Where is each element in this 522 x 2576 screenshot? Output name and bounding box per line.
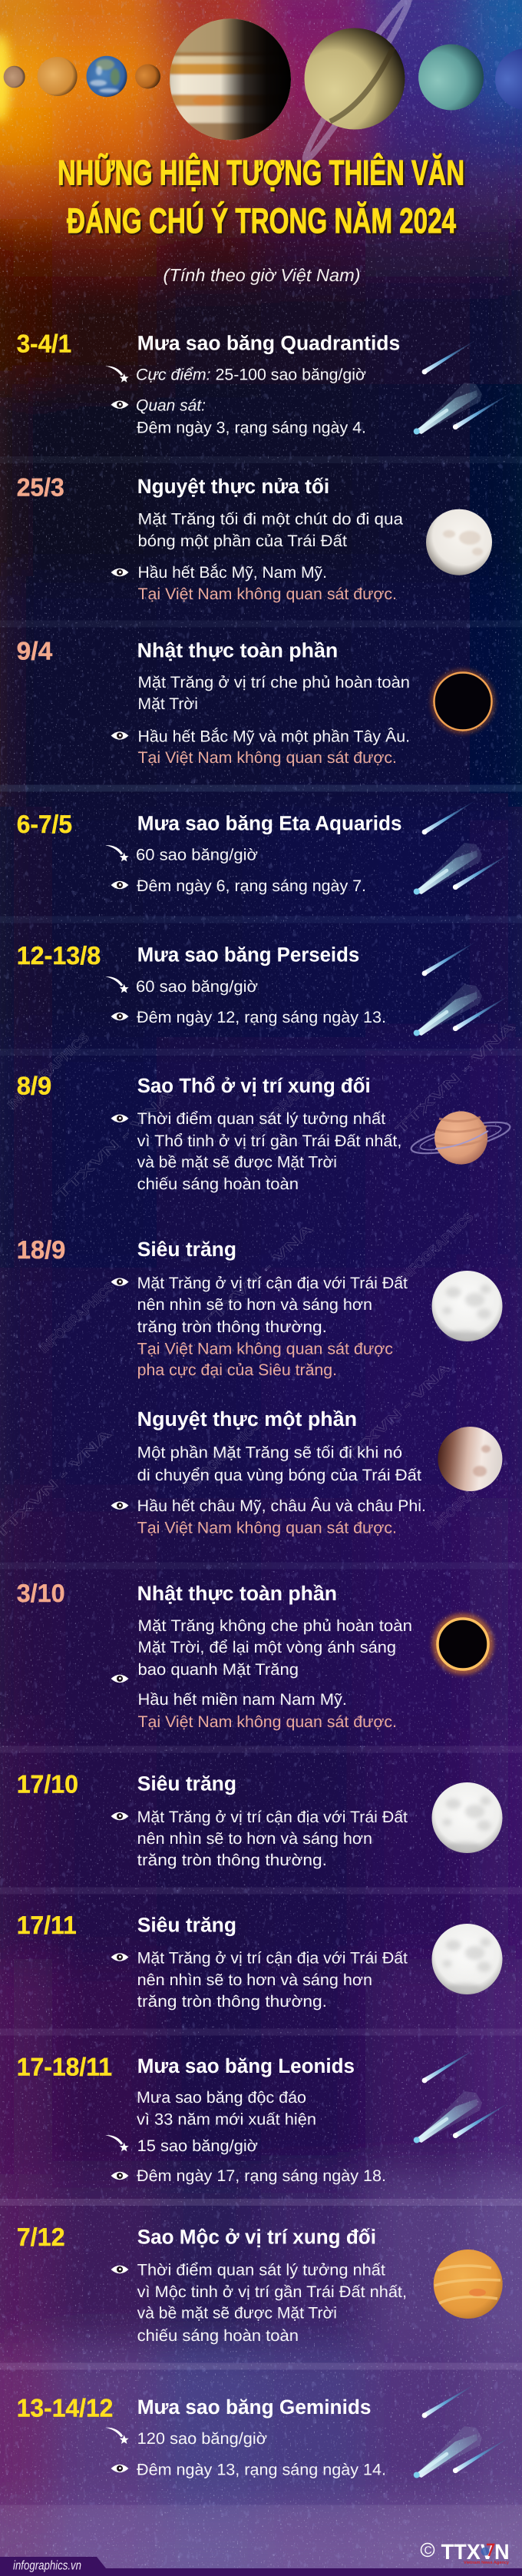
- event: 3/10 annular solar eclipse: Tại Việt Nam không quan sát được.: [138, 1713, 397, 1731]
- icon: solar eclipse: [431, 669, 495, 734]
- event: 13-14/12 Geminids: 120 sao băng/giờ: [137, 2430, 267, 2448]
- event: 3/10 annular solar eclipse: 3/10: [17, 1579, 65, 1607]
- event: 9/4 total solar eclipse: Mặt Trăng ở vị trí che phủ hoàn toàn: [138, 674, 410, 691]
- planet: Saturn ring: [299, 0, 415, 164]
- event: 8/9 Saturn opposition: vì Thổ tinh ở vị trí gần Trái Đất nhất,: [137, 1132, 401, 1150]
- event: 6-7/5 Eta Aquarids: [17, 800, 510, 895]
- icon: annular eclipse: [432, 1613, 494, 1675]
- event: 17/10 supermoon: Siêu trăng: [137, 1772, 236, 1795]
- event: 9/4 total solar eclipse: Nhật thực toàn phần: [137, 639, 338, 662]
- watermarks: INFOGRAPHICS: [182, 1417, 263, 1495]
- icon: moon: [426, 509, 492, 575]
- event: 8/9 Saturn opposition: và bề mặt sẽ được Mặt Trời: [137, 1154, 337, 1172]
- event: 17/10 supermoon: nên nhìn sẽ to hơn và sáng hơn: [137, 1830, 372, 1848]
- event: 7/12 Jupiter opposition: Sao Mộc ở vị trí xung đối: [137, 2226, 376, 2249]
- event: 3/10 annular solar eclipse: Mặt Trời, để lại một vòng ánh sáng: [138, 1639, 396, 1656]
- watermarks: TTXVN - VNA: [342, 1361, 454, 1467]
- logo: TTXVN: TTXVN: [441, 2540, 510, 2564]
- icon: supermoon: [431, 1924, 502, 1994]
- event: 12-13/8 Perseids: 60 sao băng/giờ: [136, 978, 258, 996]
- event: 25/3 penumbral lunar eclipse: bóng một phần của Trái Đất: [138, 532, 347, 550]
- event: 17-18/11 Leonids: 15 sao băng/giờ: [137, 2137, 258, 2155]
- icon: Jupiter: [434, 2249, 503, 2319]
- source: infographics.vn: infographics.vn: [13, 2559, 81, 2573]
- event: 9/4 total solar eclipse: Hầu hết Bắc Mỹ và một phần Tây Âu.: [138, 728, 410, 746]
- event: 18/9 supermoon: pha cực đại của Siêu trăng.: [137, 1361, 337, 1379]
- event: 7/12 Jupiter opposition: 7/12: [17, 2223, 65, 2251]
- event: 6-7/5 Eta Aquarids: 6-7/5: [17, 810, 72, 838]
- icon: supermoon: [431, 1782, 502, 1853]
- event: 25/3 penumbral lunar eclipse: Hầu hết Bắc Mỹ, Nam Mỹ.: [138, 563, 327, 582]
- logo: TTXVN: C: [424, 2544, 432, 2556]
- watermarks: TTXVN - VNA: [393, 1019, 518, 1137]
- planet: Uranus: [418, 45, 484, 111]
- event: 13-14/12 Geminids: Mưa sao băng Geminids: [137, 2395, 371, 2419]
- planet: Neptune: [495, 48, 522, 110]
- event: 17-18/11 Leonids: vì 33 năm mới xuất hiện: [137, 2111, 316, 2129]
- event: partial lunar eclipse: Một phần Mặt Trăng sẽ tối đi khi nó: [137, 1444, 402, 1462]
- event: 13-14/12 Geminids: [17, 2383, 510, 2478]
- event: 17/10 supermoon: Mặt Trăng ở vị trí cận địa với Trái Đất: [137, 1809, 408, 1826]
- event: 18/9 supermoon: Tại Việt Nam không quan sát được: [137, 1340, 393, 1358]
- event: 13-14/12 Geminids: 13-14/12: [17, 2394, 113, 2422]
- watermarks: INFOGRAPHICS: [249, 1066, 327, 1140]
- event: 7/12 Jupiter opposition: Thời điểm quan sát lý tưởng nhất: [137, 2262, 385, 2279]
- watermarks: INFOGRAPHICS: [37, 1279, 117, 1356]
- title: [58, 153, 464, 240]
- event: 6-7/5 Eta Aquarids: Đêm ngày 6, rạng sáng ngày 7.: [137, 877, 366, 895]
- event: 6-7/5 Eta Aquarids: 60 sao băng/giờ: [136, 847, 258, 864]
- event: 13-14/12 Geminids: Đêm ngày 13, rạng sáng ngày 14.: [137, 2462, 386, 2478]
- event: 8/9 Saturn opposition: [17, 1072, 512, 1193]
- planet: Saturn: [304, 28, 405, 129]
- watermarks: INFOGRAPHICS: [5, 1030, 92, 1112]
- event: partial lunar eclipse: Nguyệt thực một phần: [137, 1407, 357, 1431]
- event: 17-18/11 Leonids: Mưa sao băng độc đáo: [137, 2089, 306, 2107]
- event: 7/12 Jupiter opposition: và bề mặt sẽ được Mặt Trời: [137, 2305, 337, 2322]
- icon: partial eclipse moon: [438, 1427, 502, 1491]
- icon: supermoon: [431, 1271, 502, 1341]
- event: 18/9 supermoon: trăng tròn thông thường.: [137, 1318, 327, 1336]
- event: 17/10 supermoon: trăng tròn thông thường.: [137, 1852, 327, 1869]
- event: 17/11 supermoon: Mặt Trăng ở vị trí cận địa với Trái Đất: [137, 1950, 408, 1968]
- event: 12-13/8 Perseids: [17, 941, 510, 1036]
- event: 3/10 annular solar eclipse: Mặt Trăng không che phủ hoàn toàn: [138, 1617, 412, 1635]
- event: 12-13/8 Perseids: 12-13/8: [17, 941, 101, 970]
- watermarks: TTXVN - VNA: [199, 1222, 316, 1332]
- header planets: [0, 0, 522, 164]
- event: 17/10 supermoon: 17/10: [17, 1770, 78, 1799]
- planet: sun glow: [0, 34, 11, 123]
- event: 18/9 supermoon: Siêu trăng: [137, 1238, 236, 1261]
- logo: TTXVN: Vietnam News Agency: [464, 2561, 510, 2565]
- event: 17/10 supermoon: [17, 1770, 502, 1869]
- watermarks: TTXVN - VNA: [54, 1087, 176, 1202]
- event: partial lunar eclipse: Tại Việt Nam không quan sát được.: [137, 1520, 397, 1537]
- event: 6-7/5 Eta Aquarids: Mưa sao băng Eta Aquarids: [137, 812, 401, 835]
- event: 25/3 penumbral lunar eclipse: 25/3: [17, 473, 64, 502]
- event: 3-4/1 Quadrantids: Quan sát:: [136, 396, 206, 414]
- planet: Venus: [38, 57, 78, 96]
- event: partial lunar eclipse: di chuyển qua vùng bóng của Trái Đất: [137, 1467, 421, 1484]
- event: 3-4/1 Quadrantids: 3-4/1: [17, 330, 71, 358]
- event: 18/9 supermoon: nên nhìn sẽ to hơn và sáng hơn: [137, 1296, 372, 1314]
- event: 18/9 supermoon: [17, 1235, 502, 1379]
- event: 3/10 annular solar eclipse: bao quanh Mặt Trăng: [138, 1661, 299, 1679]
- event: 17/11 supermoon: trăng tròn thông thường.: [137, 1993, 327, 2011]
- event: partial lunar eclipse: [111, 1407, 502, 1537]
- event: 25/3 penumbral lunar eclipse: Nguyệt thực nửa tối: [137, 475, 329, 498]
- event: 3-4/1 Quadrantids: Cực điểm: 25-100 sao băng/giờ: [136, 366, 366, 383]
- event: 18/9 supermoon: 18/9: [17, 1235, 65, 1264]
- watermarks: INFOGRAPHICS: [397, 1209, 476, 1285]
- event: 17-18/11 Leonids: Mưa sao băng Leonids: [137, 2054, 355, 2077]
- watermarks: INFOGRAPHICS: [430, 1464, 501, 1533]
- subtitle: (Tính theo giờ Việt Nam): [163, 265, 361, 285]
- event: 25/3 penumbral lunar eclipse: [17, 473, 492, 603]
- event: 3/10 annular solar eclipse: [17, 1579, 494, 1731]
- event: 7/12 Jupiter opposition: [17, 2223, 503, 2345]
- event: 12-13/8 Perseids: Đêm ngày 12, rạng sáng ngày 13.: [137, 1009, 386, 1026]
- footer bar: [0, 2557, 522, 2576]
- planet: Earth: [86, 56, 127, 97]
- event: 9/4 total solar eclipse: Tại Việt Nam không quan sát được.: [138, 749, 397, 767]
- event: 17/11 supermoon: [17, 1911, 502, 2011]
- event: 17/11 supermoon: 17/11: [17, 1911, 77, 1939]
- event: 3-4/1 Quadrantids: [17, 330, 510, 437]
- event: partial lunar eclipse: Hầu hết châu Mỹ, châu Âu và châu Phi.: [137, 1497, 426, 1515]
- icon: Saturn: [409, 1111, 512, 1165]
- event: 17-18/11 Leonids: [17, 2048, 510, 2185]
- event: 7/12 Jupiter opposition: chiếu sáng hoàn toàn: [137, 2327, 299, 2345]
- event: 17-18/11 Leonids: Đêm ngày 17, rạng sáng ngày 18.: [137, 2167, 386, 2185]
- event: 17/11 supermoon: nên nhìn sẽ to hơn và sáng hơn: [137, 1971, 372, 1989]
- event: 8/9 Saturn opposition: 8/9: [17, 1072, 51, 1100]
- event: 12-13/8 Perseids: Mưa sao băng Perseids: [137, 943, 359, 966]
- event: 3/10 annular solar eclipse: Hầu hết miền nam Nam Mỹ.: [138, 1691, 347, 1709]
- event: 25/3 penumbral lunar eclipse: Mặt Trăng tối đi một chút do đi qua: [138, 510, 403, 529]
- planet: Jupiter: [170, 18, 291, 141]
- event: 25/3 penumbral lunar eclipse: Tại Việt Nam không quan sát được.: [138, 585, 397, 603]
- event: 7/12 Jupiter opposition: vì Mộc tinh ở vị trí gần Trái Đất nhất,: [137, 2283, 407, 2301]
- event: 3-4/1 Quadrantids: Mưa sao băng Quadrantids: [137, 332, 400, 355]
- watermarks: [0, 1019, 518, 1542]
- event: 8/9 Saturn opposition: Sao Thổ ở vị trí xung đối: [137, 1074, 371, 1097]
- event: 18/9 supermoon: Mặt Trăng ở vị trí cận địa với Trái Đất: [137, 1275, 408, 1292]
- event: 17/11 supermoon: Siêu trăng: [137, 1914, 236, 1937]
- event: 9/4 total solar eclipse: Mặt Trời: [138, 695, 198, 713]
- event: 3/10 annular solar eclipse: Nhật thực toàn phần: [137, 1582, 337, 1605]
- event: 8/9 Saturn opposition: chiếu sáng hoàn toàn: [137, 1175, 299, 1193]
- planet: Mercury: [4, 66, 25, 88]
- event: 8/9 Saturn opposition: Thời điểm quan sát lý tưởng nhất: [137, 1110, 385, 1128]
- planet: Mars: [135, 65, 160, 89]
- event: 9/4 total solar eclipse: [17, 637, 495, 767]
- event: 9/4 total solar eclipse: 9/4: [17, 637, 53, 665]
- event: 17-18/11 Leonids: 17-18/11: [17, 2052, 112, 2080]
- event: 3-4/1 Quadrantids: Đêm ngày 3, rạng sáng ngày 4.: [137, 419, 366, 437]
